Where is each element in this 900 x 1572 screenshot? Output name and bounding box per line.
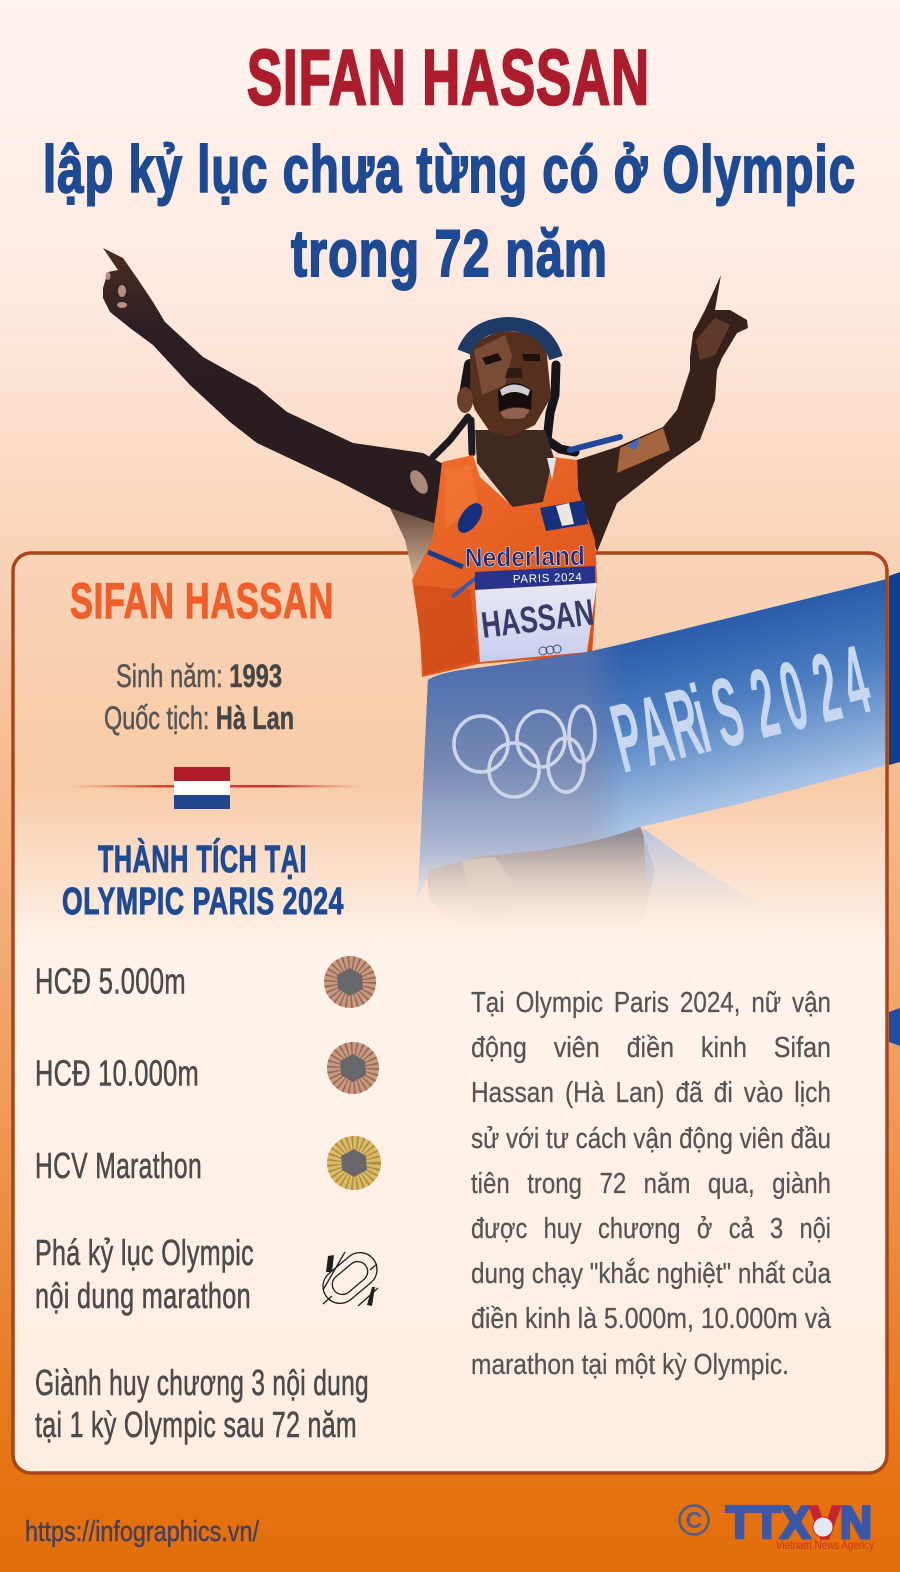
title xyxy=(43,33,856,290)
right arm highlight xyxy=(617,428,670,473)
paragraph: Hassan (Hà Lan) đã đi vào lịch xyxy=(471,1077,831,1109)
birth and nationality: Sinh năm: 1993 xyxy=(116,658,282,694)
shirt text xyxy=(428,541,595,597)
shoulder highlight xyxy=(406,467,432,497)
left hand knuckles xyxy=(106,272,127,308)
logo: TTXVN xyxy=(680,1497,874,1552)
paragraph: dung chạy "khắc nghiệt" nhất của xyxy=(471,1257,832,1290)
runner photo illustration xyxy=(103,248,812,938)
icon: bronze medal 5000m xyxy=(324,956,376,1008)
athlete name: SIFAN HASSAN xyxy=(70,573,334,629)
paragraph: sử với tư cách vận động viên đầu xyxy=(471,1123,831,1155)
legs below ribbon xyxy=(425,825,812,938)
divider with dutch flag xyxy=(70,767,362,809)
paragraph xyxy=(471,987,832,1381)
achievements heading: OLYMPIC PARIS 2024 xyxy=(62,881,344,923)
chest logos xyxy=(453,499,588,537)
achievement list: tại 1 kỳ Olympic sau 72 năm xyxy=(35,1404,357,1445)
braids xyxy=(433,365,620,457)
title: SIFAN HASSAN xyxy=(247,33,650,121)
underarm xyxy=(390,508,440,580)
achievement list: HCĐ 5.000m xyxy=(35,960,186,1002)
achievement list: nội dung marathon xyxy=(35,1275,251,1316)
singlet xyxy=(412,455,597,677)
footer url: https://infographics.vn/ xyxy=(25,1516,260,1548)
neck xyxy=(475,430,554,508)
achievement list: HCĐ 10.000m xyxy=(35,1052,199,1094)
shirt text: PARIS 2024 xyxy=(513,572,583,586)
paragraph: Tại Olympic Paris 2024, nữ vận xyxy=(471,987,831,1019)
panel: athlete info xyxy=(13,553,887,1473)
paragraph: được huy chương ở cả 3 nội xyxy=(471,1213,831,1245)
birth and nationality: Quốc tịch: Hà Lan xyxy=(104,700,294,736)
paragraph: tiên trong 72 năm qua, giành xyxy=(471,1168,831,1200)
olympic rings xyxy=(454,706,595,797)
logo: TTXVN: TTXVN xyxy=(726,1497,872,1548)
icon: gold medal marathon xyxy=(327,1136,381,1190)
shirt text: Nederland xyxy=(465,541,585,573)
achievements heading: THÀNH TÍCH TẠI xyxy=(98,837,307,881)
icon: running track xyxy=(316,1246,384,1310)
achievement list: Phá kỷ lục Olympic xyxy=(35,1232,254,1273)
paragraph: điền kinh là 5.000m, 10.000m và xyxy=(471,1303,832,1335)
left arm xyxy=(103,248,445,530)
bib: HASSAN xyxy=(479,591,596,646)
title: trong 72 năm xyxy=(291,216,608,290)
right arm xyxy=(577,275,748,552)
achievement list: HCV Marathon xyxy=(35,1145,202,1186)
bib xyxy=(475,583,597,662)
panel right border over ribbon xyxy=(885,579,889,765)
white strap xyxy=(547,458,556,480)
achievement list: Giành huy chương 3 nội dung xyxy=(35,1362,369,1403)
icon: bronze medal 10000m xyxy=(327,1042,379,1094)
achievements heading xyxy=(62,837,344,923)
achievement list xyxy=(35,960,369,1445)
logo: TTXVN: Vietnam News Agency xyxy=(776,1540,874,1552)
ribbon text: PARiS 2024 xyxy=(601,624,880,793)
ribbon: right end outside panel xyxy=(889,572,900,1046)
paragraph: marathon tại một kỳ Olympic. xyxy=(471,1349,789,1381)
finish ribbon xyxy=(418,579,887,897)
birth and nationality xyxy=(104,658,294,736)
paragraph: động viên điền kinh Sifan xyxy=(471,1032,831,1064)
logo: TTXVN: C xyxy=(686,1507,702,1533)
head xyxy=(457,324,556,437)
